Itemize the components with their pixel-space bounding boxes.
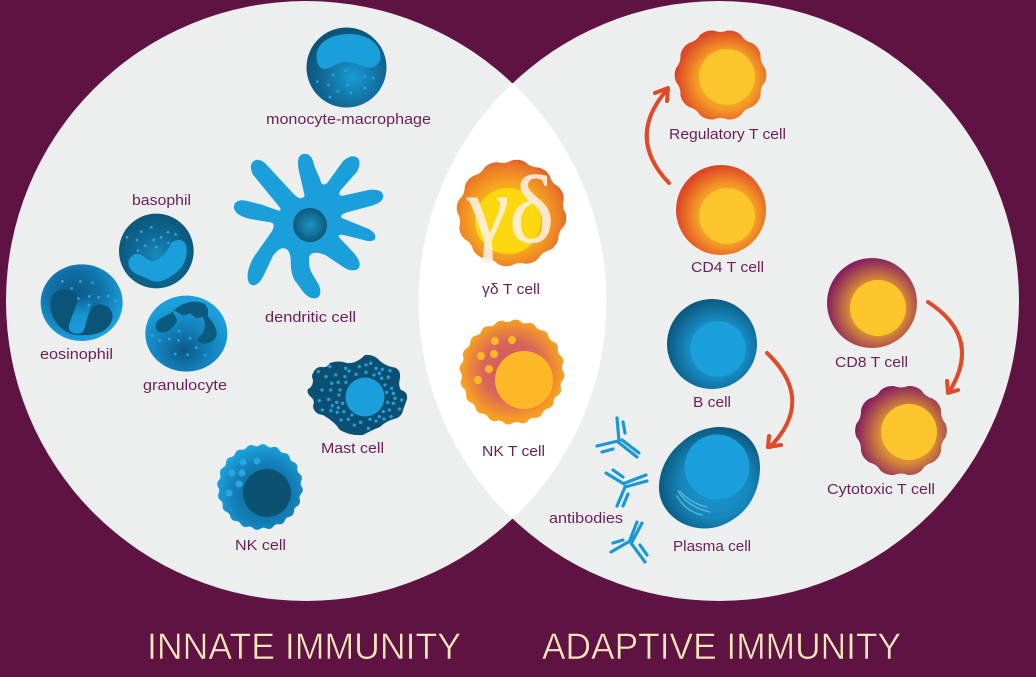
regulatory T cell nucleus <box>699 49 755 105</box>
plasma cell <box>659 427 760 528</box>
label: gamma delta T cell: γδ T cell <box>482 281 540 298</box>
NK cell nucleus <box>243 469 291 517</box>
B cell <box>667 299 757 389</box>
label: CD8 T cell: CD8 T cell <box>835 354 908 371</box>
heading: adaptive immunity: ADAPTIVE IMMUNITY <box>542 626 901 667</box>
label: monocyte-macrophage: monocyte-macrophage <box>266 111 431 128</box>
monocyte nucleus <box>316 34 381 69</box>
granulocyte cell <box>145 296 227 372</box>
B cell nucleus <box>690 321 746 377</box>
label: Plasma cell: Plasma cell <box>673 538 751 555</box>
monocyte-macrophage cell <box>306 28 386 108</box>
CD4 T cell nucleus <box>699 188 755 244</box>
plasma cell endoplasmic lines <box>677 491 710 515</box>
arrow: CD4 to regulatory T cell <box>647 88 669 183</box>
heading: innate immunity: INNATE IMMUNITY <box>147 626 461 667</box>
basophil cell <box>119 214 194 288</box>
label: CD4 T cell: CD4 T cell <box>691 259 764 276</box>
gamma delta symbol: γδ <box>466 156 554 263</box>
panel: overlap of innate and adaptive <box>419 83 606 519</box>
eosinophil nucleus <box>50 289 112 335</box>
label: basophil: basophil <box>132 192 191 209</box>
antibody 3 <box>611 522 647 562</box>
eosinophil nuclear bridge <box>69 297 93 334</box>
eosinophil granules <box>61 280 117 306</box>
dendritic nucleus <box>293 208 327 242</box>
NK T cell <box>460 320 564 424</box>
mast cell granules <box>317 362 403 430</box>
antibody 1 <box>597 418 639 457</box>
label: NK T cell: NK T cell <box>482 443 545 460</box>
label: B cell: B cell <box>693 394 731 411</box>
eosinophil cell <box>41 264 123 341</box>
NK cell <box>217 444 303 530</box>
antibody 2 <box>606 470 647 506</box>
regulatory T cell <box>668 23 773 127</box>
panel: innate immunity circle <box>6 1 606 601</box>
basophil nucleus <box>128 240 187 281</box>
cytotoxic T cell <box>849 378 953 483</box>
mast cell nucleus <box>346 378 384 416</box>
dendritic cell <box>235 155 382 297</box>
label: granulocyte: granulocyte <box>143 377 227 394</box>
label: Regulatory T cell: Regulatory T cell <box>669 126 786 143</box>
label: eosinophil: eosinophil <box>40 346 113 363</box>
label: Cytotoxic T cell: Cytotoxic T cell <box>827 481 935 498</box>
arrow: B cell to plasma cell <box>767 353 792 447</box>
basophil granules <box>126 226 177 252</box>
granulocyte granules <box>151 330 207 357</box>
NK T cell nucleus <box>495 351 553 409</box>
gamma delta T cell <box>457 156 566 266</box>
NK T cell granules <box>474 336 516 384</box>
CD8 T cell nucleus <box>850 280 906 336</box>
CD4 T cell <box>676 165 766 255</box>
plasma cell nucleus <box>684 434 750 500</box>
label: NK cell: NK cell <box>235 537 286 554</box>
granulocyte nucleus <box>156 302 217 344</box>
NK cell granules <box>226 458 260 496</box>
label: antibodies: antibodies <box>549 510 623 527</box>
cytotoxic T cell nucleus <box>881 404 937 460</box>
mast cell <box>308 355 407 435</box>
arrow: CD8 to cytotoxic T cell <box>928 302 962 393</box>
label: Mast cell: Mast cell <box>321 440 384 457</box>
monocyte granules <box>316 69 375 98</box>
label: dendritic cell: dendritic cell <box>265 309 356 326</box>
CD8 T cell <box>827 258 917 348</box>
panel: adaptive immunity circle <box>419 1 1019 601</box>
gamma delta nucleus <box>475 188 541 254</box>
